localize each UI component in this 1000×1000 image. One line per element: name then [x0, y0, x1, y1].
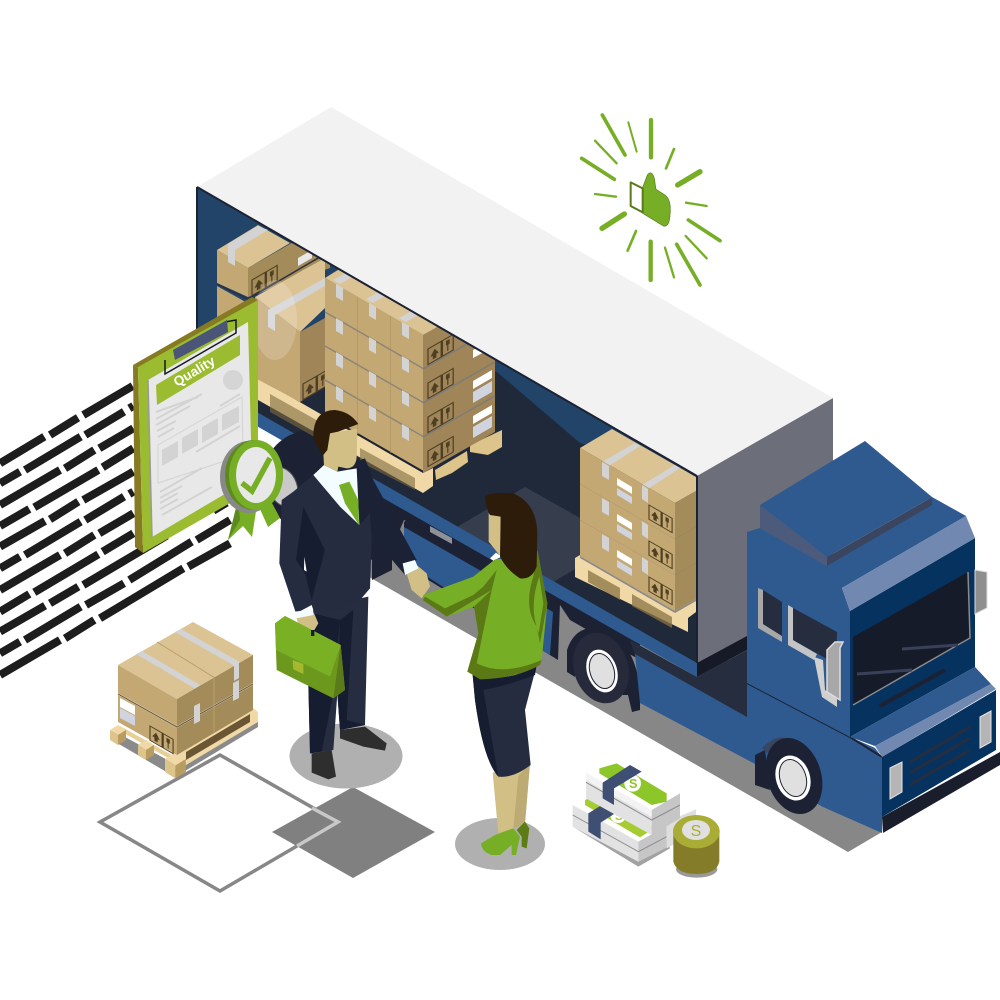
small pallet of boxes	[110, 622, 258, 778]
pallet	[258, 378, 502, 493]
quality badge	[220, 440, 283, 540]
faces	[118, 665, 177, 726]
clip	[165, 320, 236, 374]
large box	[253, 258, 328, 402]
hair	[313, 410, 358, 455]
cab side	[747, 497, 966, 737]
wipers	[857, 645, 958, 674]
back box lower	[217, 286, 260, 345]
businesswoman	[423, 493, 547, 855]
pallet	[110, 708, 258, 778]
front wheel	[755, 731, 832, 821]
briefcase	[275, 616, 345, 698]
rear hidden wheel	[262, 430, 362, 530]
headlights	[890, 711, 991, 799]
hair	[485, 493, 537, 579]
lower stack: S	[615, 809, 623, 823]
trailer underbody	[280, 425, 640, 660]
shoes	[312, 750, 336, 779]
cab front face	[850, 538, 975, 737]
jacket	[423, 550, 547, 678]
document lines	[156, 394, 243, 515]
skirt	[473, 665, 537, 777]
upper stack: S	[629, 777, 637, 791]
left hand	[296, 612, 318, 632]
lower stack	[573, 788, 667, 862]
back box upper	[217, 221, 330, 297]
right pallet of boxes	[575, 429, 696, 632]
rear wheel	[564, 625, 640, 712]
woman shadow	[455, 818, 545, 870]
trailer roof	[197, 107, 833, 476]
front grille panel	[882, 690, 996, 817]
trailer side rail	[197, 378, 697, 677]
businessman	[275, 410, 430, 779]
cab side windows	[758, 588, 837, 707]
windscreen	[853, 572, 970, 705]
rays	[582, 115, 720, 285]
man shadow	[290, 724, 402, 788]
ribbon	[228, 490, 280, 540]
top face	[580, 429, 696, 503]
paper	[148, 322, 252, 537]
avatar icon	[223, 370, 243, 390]
clipboard	[133, 297, 258, 553]
pallet	[575, 555, 696, 632]
shadow	[573, 822, 670, 867]
jacket	[279, 475, 372, 613]
floor grey square	[272, 787, 435, 878]
floor outline square	[100, 755, 338, 891]
neck and face	[489, 513, 501, 557]
heels	[517, 822, 529, 848]
hood slot	[880, 670, 945, 706]
mud flap	[372, 535, 392, 580]
top face	[118, 622, 253, 699]
cuff	[631, 182, 643, 212]
truck	[197, 187, 1000, 833]
cab visor band	[842, 516, 975, 611]
header band	[156, 335, 240, 405]
right mirror	[975, 570, 987, 614]
hood	[850, 667, 991, 746]
trailer interior	[197, 187, 697, 665]
tape	[602, 443, 640, 466]
side toolbox	[404, 518, 560, 660]
upper stack	[586, 763, 680, 835]
truck ground shadow	[350, 480, 882, 852]
shadow	[112, 716, 258, 777]
interior floor glow	[457, 487, 580, 590]
stacked cartons front	[325, 250, 470, 472]
outline overlap	[297, 808, 338, 846]
interior blue wall	[197, 187, 697, 475]
heading: Quality	[171, 353, 218, 390]
document image blocks	[162, 406, 239, 466]
cartons	[580, 448, 696, 541]
brick wall pattern	[0, 386, 230, 675]
right hand	[405, 565, 430, 598]
labels	[120, 698, 135, 715]
left mirror	[827, 642, 843, 700]
check mark	[242, 458, 270, 491]
shirt	[313, 465, 359, 525]
neck and face	[323, 428, 357, 472]
cab roof deflector	[760, 441, 932, 566]
coins	[673, 815, 720, 878]
bumper	[882, 752, 1000, 833]
under chassis gap	[630, 640, 747, 720]
tape	[136, 651, 200, 703]
trailer side wall	[697, 398, 833, 663]
thumb	[643, 173, 670, 226]
cash stacks	[573, 763, 720, 878]
side stack	[667, 809, 696, 848]
chassis side	[635, 654, 882, 833]
legs	[493, 763, 530, 833]
coins: S	[691, 823, 701, 840]
raised arm	[352, 458, 417, 575]
left pallet of boxes	[217, 221, 502, 493]
thumbs up icon	[582, 115, 720, 285]
stacked cartons side	[423, 294, 495, 473]
trousers	[308, 597, 368, 753]
grille slats	[910, 727, 970, 785]
tie	[339, 482, 359, 525]
